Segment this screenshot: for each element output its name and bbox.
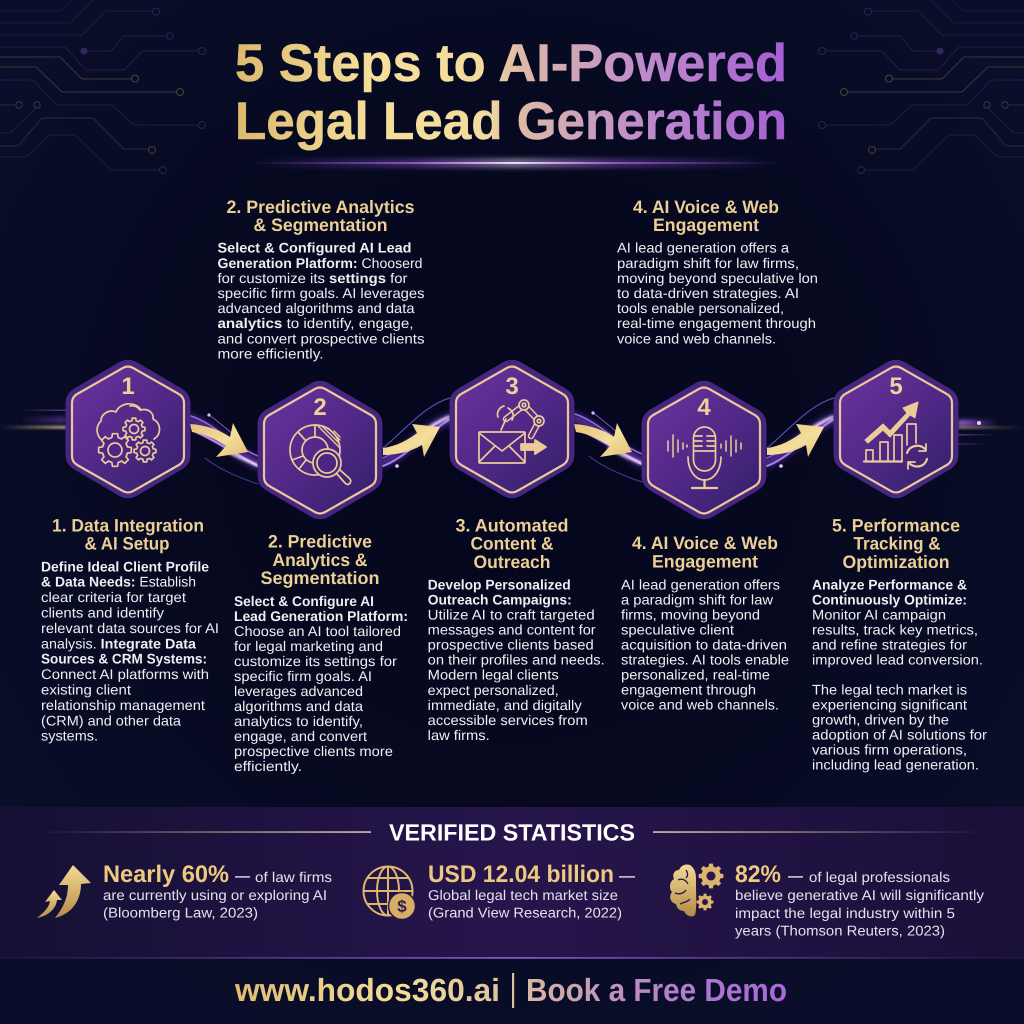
step 4 hexagon <box>644 383 764 517</box>
text block: top step 2: and convert prospective clients <box>218 330 424 346</box>
text block: step 4: firms, moving beyond <box>621 606 760 622</box>
text block: top step 2 <box>218 197 424 361</box>
text block: step 4: voice and web channels. <box>621 696 779 712</box>
text block: step 1: Sources & CRM Systems: <box>41 651 207 667</box>
icon: globe and dollar coin <box>364 866 416 920</box>
text block: step 2: 2. Predictive <box>268 532 372 552</box>
icon: brain and gears <box>670 864 723 916</box>
step 3 hexagon <box>452 362 572 496</box>
text block: step 5: results, track key metrics, <box>812 622 978 638</box>
text block: step 3: 3. Automated <box>456 515 568 535</box>
text block: step 1: (CRM) and other data <box>41 712 181 728</box>
statistic: legal professionals: — <box>788 865 803 887</box>
statistic: market size: — <box>619 865 635 887</box>
statistic: market size: (Grand View Research, 2022) <box>428 906 622 922</box>
text block: step 5: experiencing significant <box>812 696 967 712</box>
text block: step 3: prospective clients based <box>428 637 594 653</box>
text block: step 3: Outreach Campaigns: <box>428 591 572 607</box>
text block: top step 4: to data-driven strategies. AI <box>617 285 799 301</box>
text block: step 1: existing client <box>41 682 131 698</box>
text block: step 2: for legal marketing and <box>234 638 383 654</box>
statistic: legal professionals <box>735 861 985 940</box>
text block: step 1: systems. <box>41 728 98 744</box>
title <box>235 34 787 151</box>
circuit pattern right <box>818 0 1024 174</box>
icon: cloud and gears <box>97 404 160 466</box>
text block: step 5: Continuously Optimize: <box>812 591 967 607</box>
text block: top step 2: for customize its settings for <box>218 270 408 286</box>
text block: step 5: adoption of AI solutions for <box>812 726 987 742</box>
title glow divider <box>250 158 780 168</box>
text block: step 3: immediate, and digitally <box>428 697 582 713</box>
text block: step 3: accessible services from <box>428 712 588 728</box>
statistic: legal professionals: believe generative AI will significantly <box>735 888 985 904</box>
step 5 hexagon <box>836 362 956 496</box>
statistic: market size <box>428 861 635 922</box>
text block: step 5: Tracking & <box>854 533 940 553</box>
icon: envelope with robot arm <box>479 400 546 463</box>
icon: growth chart and refresh <box>864 402 927 469</box>
text block: step 2: customize its settings for <box>234 653 397 669</box>
statistics heading: VERIFIED STATISTICS <box>389 820 635 846</box>
text block: step 4: a paradigm shift for law <box>621 591 774 607</box>
text block: step 2: analytics to identify, <box>234 713 363 729</box>
text block: top step 2: specific firm goals. AI leverages <box>218 285 424 301</box>
text block: top step 2: & Segmentation <box>254 215 388 235</box>
text block: step 5: 5. Performance <box>832 515 960 535</box>
text block: step 3: Outreach <box>474 552 550 572</box>
statistic: law firms: — <box>235 865 250 887</box>
panel: verified statistics <box>0 807 1024 959</box>
statistic: legal professionals: years (Thomson Reuters, 2023) <box>735 924 945 940</box>
text block: step 5: Analyze Performance & <box>812 576 967 592</box>
text block: step 3 <box>428 515 605 743</box>
text block: top step 2: Generation Platform: Chooserd <box>218 255 422 271</box>
text block: step 4: personalized, real-time <box>621 666 770 682</box>
statistic: legal professionals: of legal professionals <box>809 870 950 886</box>
text block: step 1: relevant data sources for AI <box>41 620 219 636</box>
text block: step 5: Optimization <box>842 552 950 572</box>
text block: top step 4: real-time engagement through <box>617 315 816 331</box>
text block: step 4: AI lead generation offers <box>621 576 780 592</box>
text block: step 5: including lead generation. <box>812 756 979 772</box>
step 1 hexagon: 1 <box>121 373 135 400</box>
statistic: law firms: Nearly 60% <box>103 861 229 888</box>
title: Legal Lead Generation <box>235 92 787 151</box>
text block: top step 4: 4. AI Voice & Web <box>633 197 779 217</box>
text block: step 2: Segmentation <box>260 568 380 588</box>
text block: step 5: and refine strategies for <box>812 636 967 652</box>
text block: step 4: acquisition to data-driven <box>621 636 787 652</box>
icon: globe and dollar coin: $ <box>397 897 407 916</box>
text block: top step 2: advanced algorithms and data <box>218 300 415 316</box>
text block: step 3: law firms. <box>428 727 490 743</box>
arrow 2 to 3 <box>383 424 440 457</box>
text block: step 2: Lead Generation Platform: <box>234 608 408 624</box>
text block: top step 4: tools enable personalized, <box>617 300 784 316</box>
swoosh between steps 2 and 3 <box>383 398 450 468</box>
text block: top step 2: analytics to identify, engage, <box>218 315 414 331</box>
text block: step 5 <box>812 515 987 772</box>
statistic: market size: Global legal tech market size <box>428 888 618 904</box>
light trail right <box>958 420 1024 445</box>
step 1 hexagon <box>68 362 188 496</box>
footer call to action: Book a Free Demo <box>526 972 787 1008</box>
text block: step 2: specific firm goals. AI <box>234 668 372 684</box>
text block: step 3: messages and content for <box>428 622 596 638</box>
text block: step 2: prospective clients more <box>234 743 393 759</box>
text block: step 3: Develop Personalized <box>428 576 571 592</box>
swoosh between steps 3 and 4 <box>575 411 642 482</box>
swoosh between steps 4 and 5 <box>767 398 834 468</box>
text block: step 1: clear criteria for target <box>41 589 186 605</box>
text block: step 5: The legal tech market is <box>812 681 967 697</box>
statistic: legal professionals: 82% <box>735 861 781 888</box>
text block: top step 4: voice and web channels. <box>617 330 776 346</box>
circuit pattern left <box>0 0 206 174</box>
statistic: legal professionals: impact the legal industry within 5 <box>735 906 955 922</box>
text block: step 4: 4. AI Voice & Web <box>632 533 778 553</box>
text block: step 1: analysis. Integrate Data <box>41 635 196 651</box>
text block: step 4: strategies. AI tools enable <box>621 651 789 667</box>
text block: top step 2: Select & Configured AI Lead <box>218 240 412 256</box>
text block: step 1 <box>41 515 219 744</box>
step 4 hexagon: 4 <box>697 394 711 421</box>
text block: step 1: relationship management <box>41 697 205 713</box>
text block: step 2: engage, and convert <box>234 728 367 744</box>
arrow 4 to 5 <box>767 424 824 457</box>
text block: top step 4: paradigm shift for law firms, <box>617 255 799 271</box>
icon: chart and magnifier <box>290 425 351 484</box>
step 2 hexagon <box>260 383 380 517</box>
text block: step 2: efficiently. <box>234 758 302 774</box>
text block: top step 4 <box>617 197 818 346</box>
text block: top step 2: more efficiently. <box>218 345 324 361</box>
text block: step 2: Select & Configure AI <box>234 593 374 609</box>
title: 5 Steps to AI-Powered <box>235 34 787 93</box>
text block: step 1: Define Ideal Client Profile <box>41 558 209 574</box>
arrow 1 to 2 <box>190 423 248 457</box>
text block: top step 4: AI lead generation offers a <box>617 240 789 256</box>
text block: step 3: Utilize AI to craft targeted <box>428 606 595 622</box>
text block: step 4: engagement through <box>621 681 756 697</box>
arrow 3 to 4 <box>574 423 632 457</box>
text block: step 2: algorithms and data <box>234 698 363 714</box>
text block: step 5: various firm operations, <box>812 741 967 757</box>
text block: step 1: Connect AI platforms with <box>41 666 209 682</box>
text block: step 3: Modern legal clients <box>428 667 559 683</box>
text block: top step 2: 2. Predictive Analytics <box>226 197 414 217</box>
text block: step 2: leverages advanced <box>234 683 363 699</box>
text block: step 5: growth, driven by the <box>812 711 949 727</box>
swoosh between steps 1 and 2 <box>191 413 258 484</box>
light trail left <box>0 410 66 428</box>
text block: step 2 <box>234 532 408 774</box>
step 5 hexagon: 5 <box>889 373 903 400</box>
statistic: law firms <box>103 861 332 922</box>
footer call to action: www.hodos360.ai <box>234 972 500 1008</box>
text block: step 1: clients and identify <box>41 604 164 620</box>
text block: step 1: & Data Needs: Establish <box>41 574 196 590</box>
text block: step 3: Content & <box>470 533 554 553</box>
statistic: market size: USD 12.04 billion <box>428 861 614 888</box>
text block: step 5: Monitor AI campaign <box>812 606 946 622</box>
text block: step 5: improved lead conversion. <box>812 652 983 668</box>
text block: step 2: Analytics & <box>272 550 368 570</box>
statistic: law firms: are currently using or exploring AI <box>103 888 327 904</box>
text block: step 1: 1. Data Integration <box>52 515 204 535</box>
statistic: law firms: of law firms <box>255 870 332 886</box>
statistic: law firms: (Bloomberg Law, 2023) <box>103 906 258 922</box>
icon: microphone with sound waves <box>668 427 741 488</box>
icon: rising arrows <box>37 865 91 918</box>
text block: step 2: Choose an AI tool tailored <box>234 623 401 639</box>
text block: step 4: Engagement <box>652 552 758 572</box>
step 2 hexagon: 2 <box>313 394 327 421</box>
text block: step 4 <box>621 533 789 712</box>
text block: step 3: expect personalized, <box>428 682 559 698</box>
text block: step 4: speculative client <box>621 621 734 637</box>
text block: top step 4: Engagement <box>653 215 759 235</box>
step 3 hexagon: 3 <box>505 373 519 400</box>
text block: top step 4: moving beyond speculative lon <box>617 270 818 286</box>
text block: step 3: on their profiles and needs. <box>428 652 605 668</box>
footer call to action <box>234 972 787 1008</box>
text block: step 1: & AI Setup <box>84 533 170 553</box>
